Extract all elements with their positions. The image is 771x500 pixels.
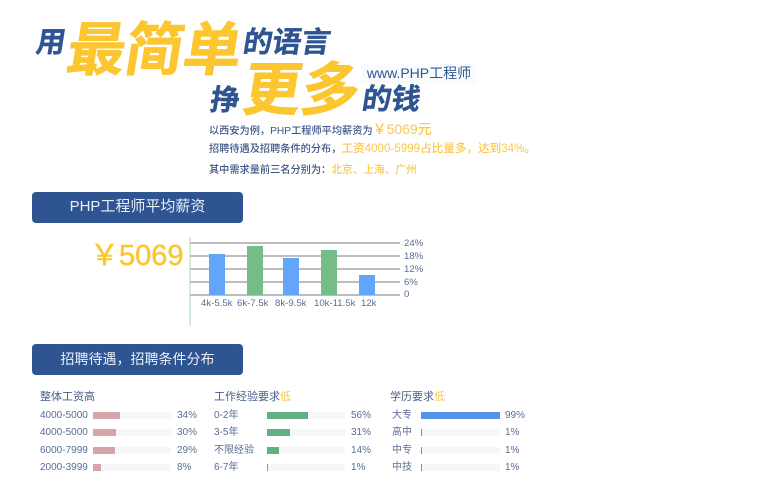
section heading: average salary: PHP工程师平均薪资: [70, 198, 205, 215]
row 0-2年 56%: 0-2年: [214, 410, 238, 421]
row 6000-7999 29%: [40, 445, 197, 456]
panel: overall salary: [40, 390, 197, 473]
row 4000-5000 34%: [40, 410, 197, 421]
title word: 最简单: 最简单: [63, 18, 247, 83]
row 4000-5000 30%: [40, 427, 197, 438]
label 18%: 18%: [404, 251, 423, 262]
row 大专 99%: [392, 409, 525, 421]
bar 6k-7.5k: [247, 246, 263, 295]
bar 10k-11.5k: [321, 250, 337, 295]
title word: 的钱: 的钱: [360, 84, 423, 116]
row 4000-5000 34%: 34%: [177, 410, 197, 421]
website label: [361, 63, 477, 84]
row 中专 1%: 中专: [392, 445, 412, 456]
big salary number: ￥5069: [90, 240, 184, 272]
row 2000-3999 8%: 2000-3999: [40, 462, 88, 473]
row 不限经验 14%: 14%: [351, 445, 371, 456]
row 0-2年 56%: [214, 409, 371, 421]
row 中技 1%: 中技: [392, 462, 412, 473]
row 中技 1%: [392, 461, 520, 473]
label 6%: 6%: [404, 277, 418, 288]
row 2000-3999 8%: [40, 462, 192, 473]
section heading: average salary: [32, 192, 243, 223]
bar 12k: [359, 275, 375, 295]
x axis labels: [201, 298, 376, 309]
label 10k-11.5k: 10k-11.5k: [314, 298, 355, 309]
bar 8k-9.5k: [283, 258, 299, 295]
section heading: pay and requirements: [32, 344, 243, 375]
label 24%: 24%: [404, 238, 423, 249]
title word: 的语言: 的语言: [241, 27, 333, 59]
row 高中 1%: 1%: [505, 427, 519, 438]
row 6-7年 1%: 6-7年: [214, 462, 238, 473]
heading: overall salary: 整体工资高: [40, 391, 95, 403]
row 6-7年 1%: [214, 461, 366, 473]
row 不限经验 14%: [214, 444, 371, 456]
panel: work experience: [214, 390, 371, 473]
intro line 3: 其中需求量前三名分别为：北京、上海、广州: [209, 164, 417, 176]
row 4000-5000 34%: 4000-5000: [40, 410, 88, 421]
y axis labels: [404, 238, 423, 300]
bar 4k-5.5k: [209, 254, 225, 295]
row 3-5年 31%: 3-5年: [214, 427, 238, 438]
label 12k: 12k: [361, 298, 376, 309]
title: [34, 18, 423, 123]
title word: 用: 用: [34, 27, 68, 59]
section heading: pay and requirements: 招聘待遇，招聘条件分布: [60, 351, 214, 367]
row 高中 1%: 高中: [392, 427, 412, 438]
row 高中 1%: [392, 426, 520, 438]
heading: education: 学历要求低: [390, 391, 445, 403]
bar chart: salary distribution: [189, 237, 423, 326]
label 12%: 12%: [404, 264, 423, 275]
row 大专 99%: 99%: [505, 410, 525, 421]
chart vertical axis: [189, 237, 191, 326]
row 2000-3999 8%: 8%: [177, 462, 191, 473]
panel: education: [390, 390, 525, 473]
row 3-5年 31%: [214, 426, 371, 438]
row 不限经验 14%: 不限经验: [214, 445, 254, 456]
row 0-2年 56%: 56%: [351, 410, 371, 421]
row 4000-5000 30%: 4000-5000: [40, 427, 88, 438]
label 6k-7.5k: 6k-7.5k: [237, 298, 268, 309]
heading: work experience: 工作经验要求低: [214, 391, 291, 403]
row 中技 1%: 1%: [505, 462, 519, 473]
row 4000-5000 30%: 30%: [177, 427, 197, 438]
label 4k-5.5k: 4k-5.5k: [201, 298, 232, 309]
row 6000-7999 29%: 29%: [177, 445, 197, 456]
title word: 更多: 更多: [239, 58, 365, 123]
label 8k-9.5k: 8k-9.5k: [275, 298, 306, 309]
intro text: [209, 121, 536, 176]
row 6-7年 1%: 1%: [351, 462, 365, 473]
row 3-5年 31%: 31%: [351, 427, 371, 438]
intro line 1: 以西安为例，PHP工程师平均薪资为￥5069元: [209, 121, 432, 137]
row 中专 1%: 1%: [505, 445, 519, 456]
title word: 挣: 挣: [208, 85, 242, 117]
intro line 2: 招聘待遇及招聘条件的分布，工资4000-5999占比量多，达到34%。: [209, 142, 536, 155]
website label: www.PHP工程师: [367, 65, 471, 81]
row 中专 1%: [392, 444, 520, 456]
row 6000-7999 29%: 6000-7999: [40, 445, 88, 456]
label 0: 0: [404, 289, 409, 300]
row 大专 99%: 大专: [392, 410, 412, 421]
